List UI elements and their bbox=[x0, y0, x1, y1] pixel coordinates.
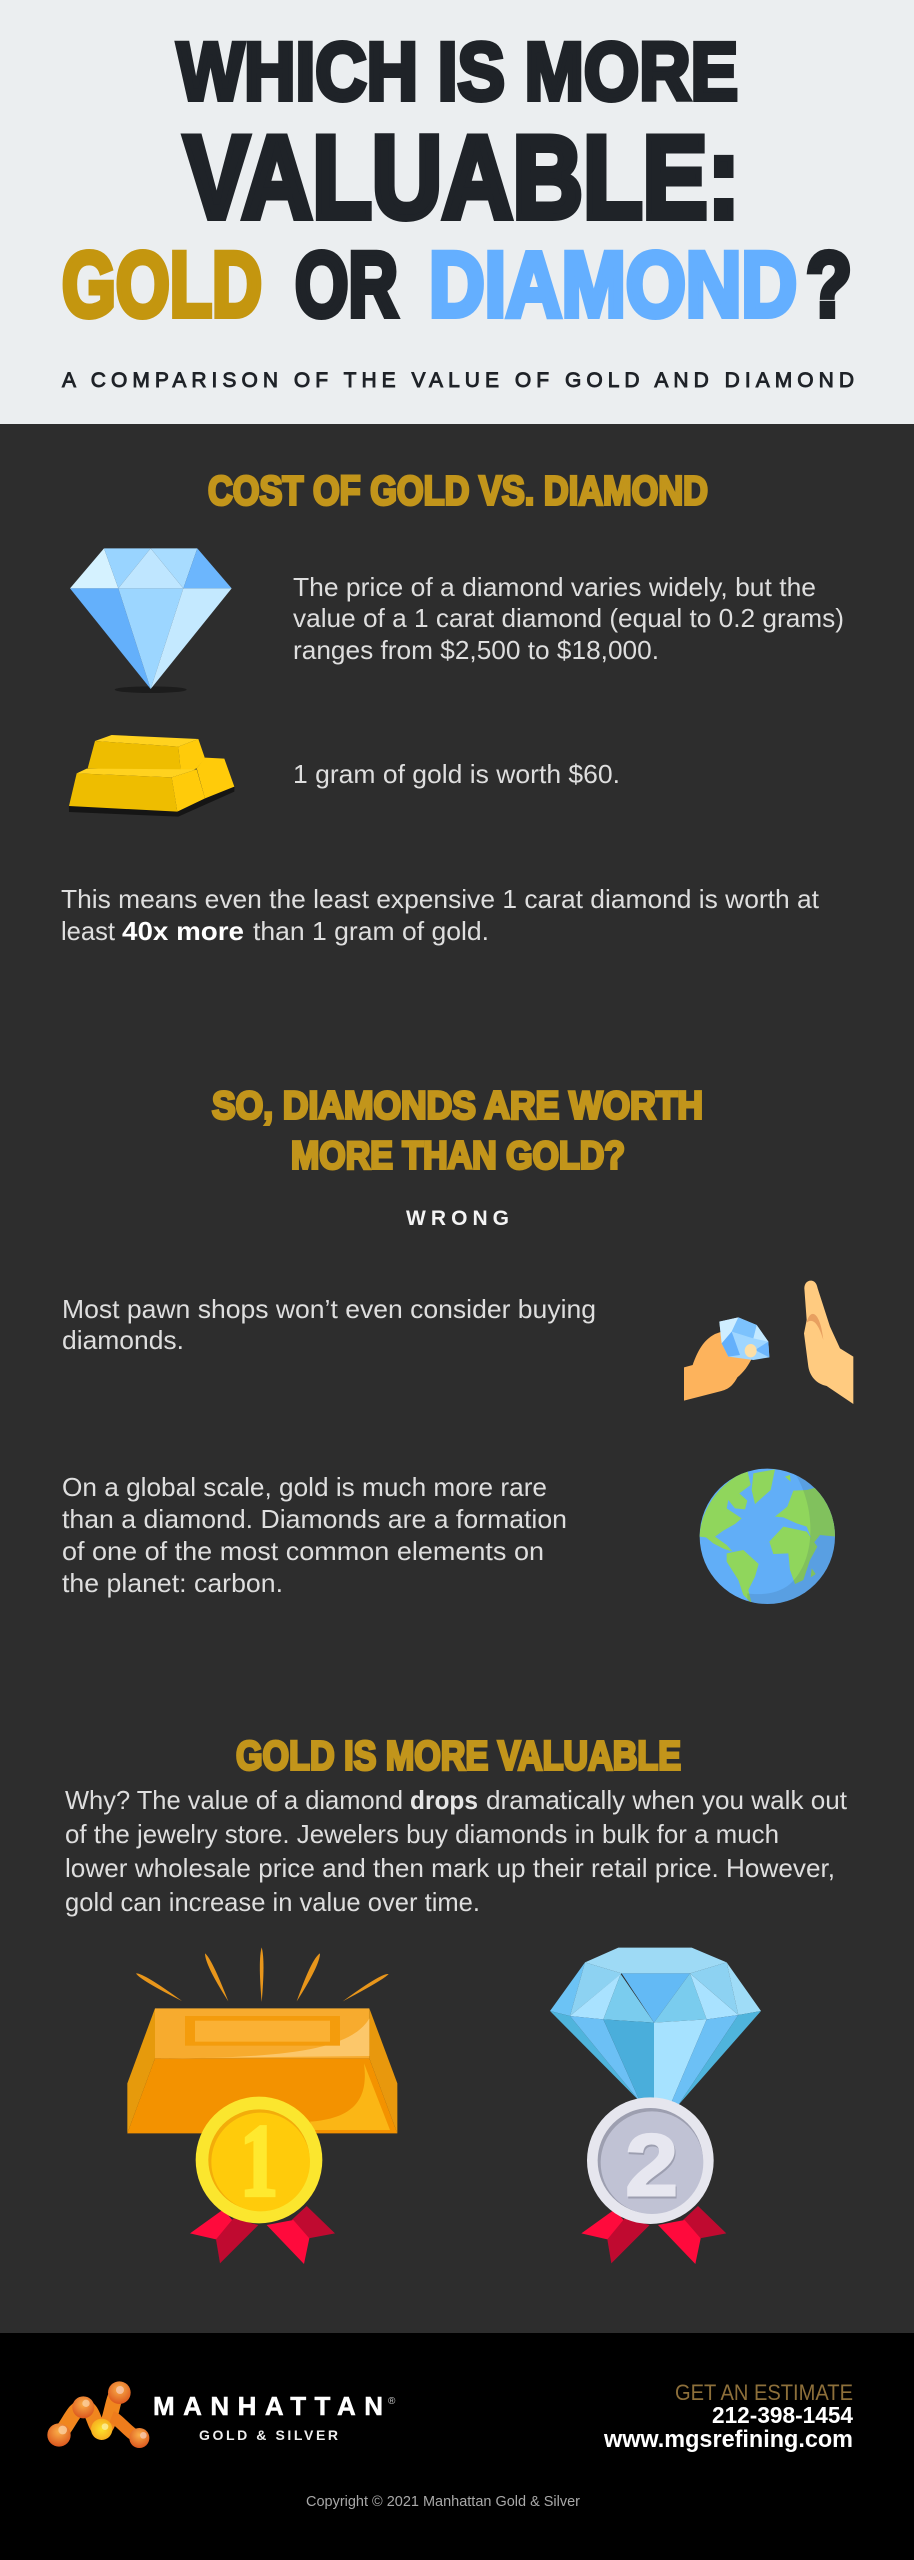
contact details: GET AN ESTIMATE bbox=[675, 2380, 853, 2405]
gold bar bbox=[127, 2008, 397, 2133]
text: gold rarity: of one of the most common elements on bbox=[62, 1536, 544, 1566]
icon: gold bars bbox=[69, 735, 234, 817]
text: comparison conclusion: least bbox=[61, 916, 116, 946]
title line: gold or diamond: GOLD bbox=[62, 234, 262, 336]
text: diamond price: value of a 1 carat diamond (equal to 0.2 grams) bbox=[293, 603, 844, 633]
text: gold rarity: than a diamond. Diamonds are a formation bbox=[62, 1504, 567, 1534]
text: diamond price: The price of a diamond varies widely, but the bbox=[293, 572, 816, 602]
header panel bbox=[0, 0, 914, 424]
icon: diamond second place medal bbox=[550, 1948, 761, 2264]
contact details: www.mgsrefining.com bbox=[603, 2426, 853, 2453]
label: wrong: WRONG bbox=[406, 1207, 509, 1230]
text: pawn shops: diamonds. bbox=[62, 1325, 184, 1355]
text: why gold: Why? The value of a diamond bbox=[65, 1785, 403, 1815]
medal 2: 2 bbox=[625, 2116, 678, 2215]
red ribbon bbox=[190, 2206, 335, 2264]
medal 2: 2 bbox=[626, 2118, 679, 2217]
text: diamond price bbox=[293, 572, 844, 665]
icon: globe bbox=[699, 1467, 840, 1607]
heading: so diamonds: MORE THAN GOLD? bbox=[291, 1134, 625, 1178]
panel: cost of gold vs diamond bbox=[61, 468, 844, 946]
subtitle: A COMPARISON OF THE VALUE OF GOLD AND DIAMOND bbox=[62, 369, 854, 392]
heading: so diamonds bbox=[212, 1084, 703, 1178]
logo wordmark: ® bbox=[388, 2396, 396, 2407]
text: gold rarity bbox=[62, 1472, 567, 1598]
text: why gold bbox=[65, 1785, 848, 1917]
text: why gold: lower wholesale price and then mark up their retail price. However, bbox=[65, 1853, 835, 1883]
title line: valuable: VALUABLE: bbox=[184, 112, 740, 242]
text: gold price: 1 gram of gold is worth $60. bbox=[293, 759, 620, 789]
medal 1 bbox=[196, 2097, 322, 2223]
icon: gold bar first place medal bbox=[127, 1947, 397, 2264]
large diamond bbox=[550, 1948, 761, 2105]
text: why gold: drops bbox=[410, 1785, 478, 1815]
text: gold rarity: On a global scale, gold is much more rare bbox=[62, 1472, 547, 1502]
text: comparison conclusion bbox=[61, 884, 820, 946]
logo wordmark bbox=[153, 2391, 396, 2443]
text: why gold: gold can increase in value over time. bbox=[65, 1887, 480, 1917]
panel: diamonds worth more bbox=[62, 1084, 853, 1607]
medal 2 bbox=[587, 2097, 714, 2224]
text: gold rarity: the planet: carbon. bbox=[62, 1568, 283, 1598]
copyright: Copyright © 2021 Manhattan Gold & Silver bbox=[306, 2493, 580, 2510]
text: why gold: of the jewelry store. Jewelers buy diamonds in bulk for a much bbox=[65, 1819, 779, 1849]
logo wordmark: MANHATTAN bbox=[153, 2391, 383, 2421]
logo wordmark: GOLD & SILVER bbox=[199, 2427, 338, 2443]
panel: footer bbox=[0, 2333, 914, 2560]
text: comparison conclusion: than 1 gram of gold. bbox=[253, 916, 489, 946]
heading: so diamonds: SO, DIAMONDS ARE WORTH bbox=[212, 1084, 703, 1128]
text: comparison conclusion: This means even the least expensive 1 carat diamond is worth at bbox=[61, 884, 820, 914]
icon: hand offering diamond and refusing hand bbox=[684, 1281, 853, 1404]
medal 1: 1 bbox=[240, 2105, 278, 2219]
text: comparison conclusion: 40x more bbox=[122, 916, 244, 946]
title line: gold or diamond: DIAMOND bbox=[429, 234, 797, 336]
rays bbox=[136, 1947, 389, 2002]
title line: gold or diamond: ? bbox=[806, 234, 852, 336]
title line: which is more: WHICH IS MORE bbox=[177, 26, 738, 118]
icon: diamond bbox=[70, 548, 232, 693]
panel: gold is more valuable bbox=[65, 1732, 848, 2264]
text: why gold: dramatically when you walk out bbox=[486, 1785, 848, 1815]
heading: cost: COST OF GOLD VS. DIAMOND bbox=[208, 468, 708, 514]
title line: gold or diamond: OR bbox=[295, 234, 398, 336]
contact details: 212-398-1454 bbox=[712, 2402, 853, 2428]
heading: gold is more valuable: GOLD IS MORE VALUABLE bbox=[236, 1732, 681, 1778]
title line: gold or diamond bbox=[62, 234, 852, 336]
icon: logo molecule bbox=[47, 2381, 149, 2448]
text: diamond price: ranges from $2,500 to $18,000. bbox=[293, 635, 659, 665]
text: pawn shops: Most pawn shops won’t even consider buying bbox=[62, 1294, 596, 1324]
text: pawn shops bbox=[62, 1294, 596, 1355]
red ribbon bbox=[581, 2206, 726, 2264]
contact details bbox=[603, 2380, 853, 2453]
dark page background bbox=[0, 424, 914, 2334]
